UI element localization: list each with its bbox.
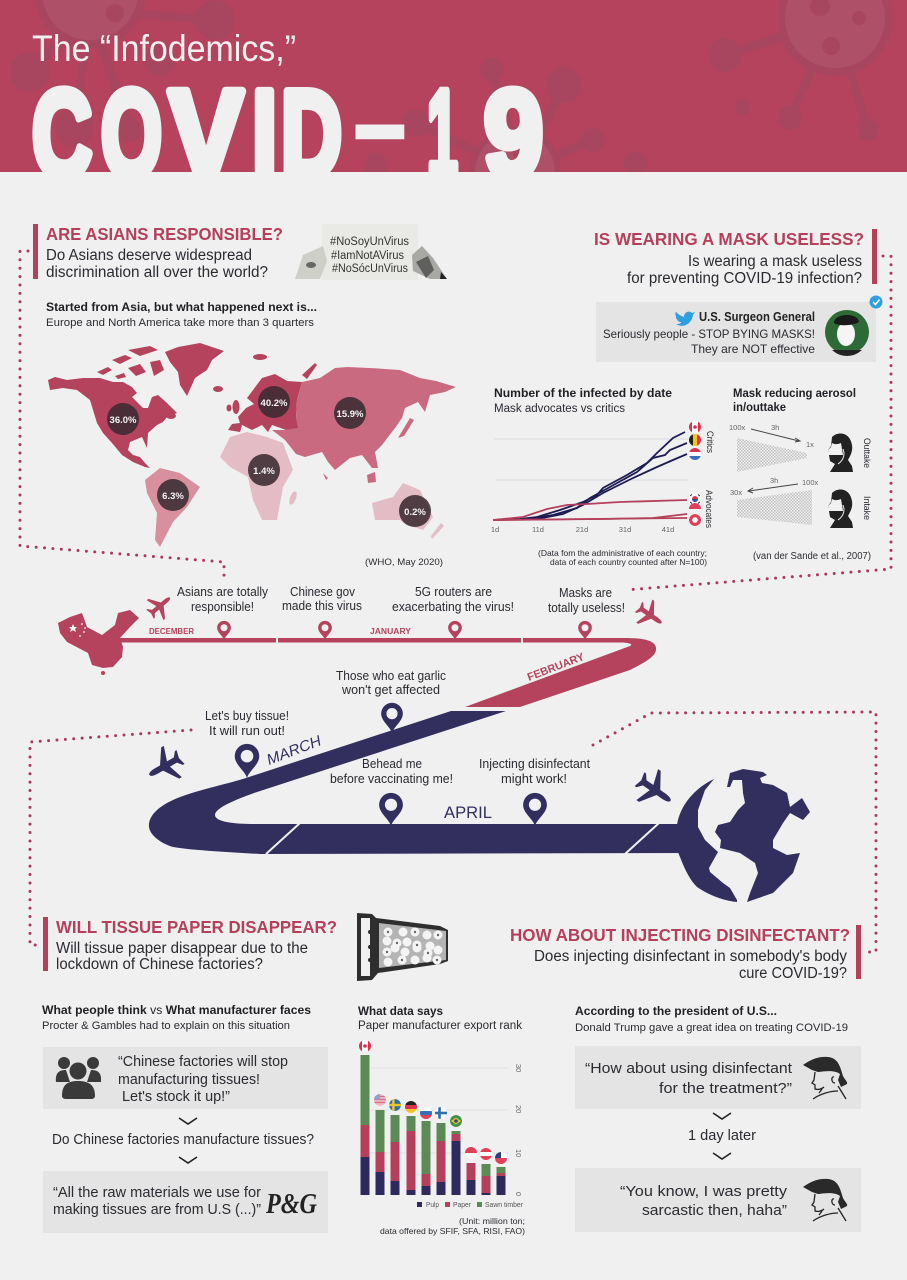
question: cure COVID-19? bbox=[739, 965, 847, 982]
mask aerosol heading: in/outtake bbox=[733, 400, 786, 414]
icons: planes bbox=[140, 588, 681, 816]
heading: IS WEARING A MASK USELESS? bbox=[594, 229, 864, 249]
question bbox=[56, 940, 308, 973]
group labels: Critics bbox=[705, 431, 715, 453]
section bar bbox=[33, 224, 38, 279]
diagram: intake: 3h bbox=[770, 476, 778, 485]
axis labels: 21d bbox=[576, 525, 588, 534]
axis labels: 10 bbox=[514, 1149, 523, 1157]
critic lines bbox=[493, 432, 687, 520]
quote box: second statement: “You know, I was pretty bbox=[620, 1183, 788, 1200]
question: discrimination all over the world? bbox=[46, 264, 268, 281]
map pins navy bbox=[235, 703, 547, 826]
icon: people bbox=[56, 1057, 101, 1099]
rumor labels: Injecting disinfectant bbox=[479, 757, 591, 771]
title: COVID-19: 9 bbox=[484, 66, 543, 204]
question bbox=[46, 247, 268, 281]
chart note: data of each country counted after N=100) bbox=[550, 557, 707, 567]
question line: Do Chinese factories manufacture tissues? bbox=[52, 1132, 314, 1148]
axis labels: 41d bbox=[662, 525, 674, 534]
question: lockdown of Chinese factories? bbox=[56, 956, 263, 973]
subheading: According to the president of U.S... bbox=[575, 1004, 777, 1018]
axis labels: 31d bbox=[619, 525, 631, 534]
rumor labels bbox=[177, 585, 625, 786]
tweet text: They are NOT effective bbox=[691, 342, 815, 356]
icon: Trump portrait bbox=[803, 1179, 847, 1221]
heading: ARE ASIANS RESPONSIBLE? bbox=[46, 224, 283, 244]
hashtag sign: #IamNotAVirus bbox=[331, 250, 404, 262]
chart heading: What data says bbox=[358, 1004, 443, 1018]
icon: twitter bird bbox=[675, 312, 695, 326]
subtext: Procter & Gambles had to explain on this situation bbox=[42, 1020, 290, 1032]
background virus shapes bbox=[10, 0, 893, 172]
world map bbox=[48, 343, 456, 547]
rumor labels: made this virus bbox=[282, 599, 362, 613]
title: COVID-19: - bbox=[348, 53, 412, 191]
title line: The “Infodemics,” bbox=[32, 28, 296, 69]
icon: surgeon avatar bbox=[825, 310, 869, 356]
value labels: 0.2% bbox=[404, 507, 426, 518]
rumor labels: responsible! bbox=[191, 600, 254, 614]
source: (WHO, May 2020) bbox=[365, 557, 443, 568]
Asia bbox=[272, 367, 456, 483]
source: (van der Sande et al., 2007) bbox=[753, 551, 871, 562]
rumor labels: Masks are bbox=[559, 586, 612, 600]
diagram: intake bbox=[730, 476, 872, 528]
quote box: first statement: for the treatment?” bbox=[659, 1080, 792, 1097]
axis labels bbox=[491, 525, 674, 534]
arrow chevron bbox=[713, 1153, 731, 1159]
section bar bbox=[872, 229, 877, 284]
quote box: P&G bbox=[43, 1171, 328, 1233]
group labels bbox=[704, 431, 715, 528]
quote box: people: Let's stock it up!” bbox=[122, 1089, 230, 1105]
axis labels: 20 bbox=[514, 1105, 523, 1113]
chart subheading: Paper manufacturer export rank bbox=[358, 1020, 522, 1032]
hashtag sign: #NoSoyUnVirus bbox=[330, 236, 409, 248]
subheading: What people think vs What manufacturer faces bbox=[42, 1003, 311, 1017]
sawn timber segments bbox=[360, 1055, 506, 1176]
quote box: first statement bbox=[575, 1046, 861, 1109]
Australia bbox=[372, 483, 444, 539]
value labels: 6.3% bbox=[162, 491, 184, 502]
icon: masked head bbox=[828, 489, 853, 528]
legend: Paper bbox=[453, 1200, 471, 1209]
subtext: Donald Trump gave a great idea on treating COVID-19 bbox=[575, 1022, 848, 1034]
title: COVID-19: D bbox=[281, 66, 342, 204]
value labels: 15.9% bbox=[337, 409, 364, 420]
diagram: outtake: Outtake bbox=[862, 438, 872, 468]
rumor labels: totally useless! bbox=[548, 601, 625, 615]
icon: China map bbox=[58, 610, 139, 675]
month label: April: APRIL bbox=[444, 803, 492, 822]
question: Will tissue paper disappear due to the bbox=[56, 940, 308, 957]
chart heading: Number of the infected by date bbox=[494, 386, 672, 400]
logo: P&G: P&G bbox=[265, 1188, 317, 1220]
value labels: 36.0% bbox=[110, 415, 137, 426]
tweet text: Seriously people - STOP BYING MASKS! bbox=[603, 327, 815, 341]
tweet card bbox=[596, 296, 882, 362]
icon: verified check bbox=[870, 296, 882, 308]
hashtag sign bbox=[295, 224, 447, 280]
rumor labels: It will run out! bbox=[209, 724, 285, 738]
question: for preventing COVID-19 infection? bbox=[627, 270, 862, 287]
quote box: people bbox=[43, 1047, 328, 1109]
quote box: second statement bbox=[575, 1168, 861, 1232]
icon: masked head bbox=[828, 433, 853, 472]
pulp segments bbox=[360, 1141, 506, 1195]
value labels bbox=[110, 398, 426, 518]
quote box: second statement: sarcastic then, haha” bbox=[642, 1202, 787, 1219]
question bbox=[627, 253, 862, 287]
title: COVID-19: I bbox=[252, 66, 277, 204]
chart subheading: Mask advocates vs critics bbox=[494, 403, 625, 415]
value labels: 1.4% bbox=[253, 466, 275, 477]
quote box: P&G: “All the raw materials we use for bbox=[53, 1185, 261, 1201]
stacked bar chart bbox=[359, 1040, 523, 1209]
rumor labels: 5G routers are bbox=[415, 585, 492, 599]
question: Is wearing a mask useless bbox=[688, 253, 862, 270]
quote box: first statement: “How about using disinfectant bbox=[585, 1060, 793, 1077]
axis labels bbox=[514, 1064, 523, 1196]
dotted connector: right bottom bbox=[593, 712, 876, 952]
section bar bbox=[856, 925, 861, 979]
dotted connector: left top bbox=[20, 251, 224, 582]
panel: are Asians responsible bbox=[33, 224, 456, 568]
diagram: intake: Intake bbox=[862, 496, 872, 520]
diagram: outtake: 100x bbox=[729, 423, 746, 432]
value labels: 40.2% bbox=[261, 398, 288, 409]
panel: injecting disinfectant bbox=[510, 925, 861, 1232]
value bubbles bbox=[107, 386, 431, 527]
panel: is wearing a mask useless bbox=[491, 229, 882, 567]
road separators bbox=[266, 636, 659, 854]
time label: 1 day later bbox=[688, 1128, 756, 1144]
subheading: Started from Asia, but what happened next is... bbox=[46, 300, 317, 314]
tweet text: U.S. Surgeon General bbox=[699, 310, 815, 324]
arrow chevron bbox=[713, 1113, 731, 1119]
icon: Trump portrait bbox=[803, 1057, 847, 1099]
tweet text bbox=[603, 310, 815, 356]
legend: Pulp bbox=[426, 1200, 439, 1209]
chart note: (Unit: million ton; bbox=[459, 1216, 525, 1226]
South America bbox=[145, 468, 200, 547]
chart note: (Data fom the administrative of each country; bbox=[538, 548, 707, 558]
rumor labels: Behead me bbox=[362, 757, 422, 771]
section bar bbox=[43, 917, 48, 971]
chart note bbox=[380, 1216, 525, 1236]
month labels: DECEMBER bbox=[149, 627, 194, 636]
diagram: outtake: 3h bbox=[771, 423, 779, 432]
dotted connector: left bottom bbox=[30, 730, 191, 945]
dotted connector: right top bbox=[625, 256, 891, 590]
header banner bbox=[0, 0, 907, 172]
rumor labels: might work! bbox=[501, 772, 567, 786]
diagram: outtake: 1x bbox=[806, 440, 814, 449]
heading: WILL TISSUE PAPER DISAPPEAR? bbox=[56, 917, 337, 937]
chart note bbox=[538, 548, 707, 567]
line chart: infected by date bbox=[491, 421, 715, 534]
axis labels: 11d bbox=[532, 525, 544, 534]
rumor labels: Chinese gov bbox=[290, 585, 356, 599]
arrow chevron bbox=[179, 1118, 197, 1124]
icon: globe bbox=[676, 769, 810, 902]
axis labels: 0 bbox=[514, 1192, 523, 1196]
icon: shopping cart with rolls bbox=[357, 913, 448, 981]
bar flags bbox=[359, 1040, 507, 1164]
arrow chevron bbox=[179, 1157, 197, 1163]
rumor labels: Asians are totally bbox=[177, 585, 269, 599]
panel: will tissue paper disappear bbox=[42, 913, 448, 1233]
month labels bbox=[149, 627, 587, 769]
group labels: Advocates bbox=[704, 490, 714, 528]
country flags bbox=[689, 421, 701, 526]
paper segments bbox=[360, 1125, 506, 1193]
legend: Sawn timber bbox=[485, 1200, 523, 1209]
map pins bbox=[217, 621, 592, 640]
month labels: JANUARY bbox=[370, 627, 412, 636]
rumor labels: won't get affected bbox=[341, 683, 440, 697]
month labels: FEBRUARY bbox=[526, 651, 587, 684]
chart note: data offered by SFIF, SFA, RISI, FAO) bbox=[380, 1226, 525, 1236]
month labels: MARCH bbox=[264, 732, 324, 769]
rumor labels: exacerbating the virus! bbox=[392, 600, 514, 614]
hashtag sign: #NoSócUnVirus bbox=[332, 263, 408, 275]
Africa bbox=[220, 432, 298, 520]
quote box: people: manufacturing tissues! bbox=[118, 1072, 260, 1088]
title: COVID-19: 1 bbox=[427, 66, 458, 204]
axis labels: 1d bbox=[491, 525, 499, 534]
title: COVID-19: C bbox=[32, 66, 92, 204]
title: COVID-19: O bbox=[101, 66, 162, 204]
diagram: outtake bbox=[729, 423, 872, 472]
axis labels: 30 bbox=[514, 1064, 523, 1072]
question: Do Asians deserve widespread bbox=[46, 247, 252, 264]
mask aerosol heading: Mask reducing aerosol bbox=[733, 386, 856, 400]
panel: what data says bbox=[358, 1004, 525, 1236]
quote box: people: “Chinese factories will stop bbox=[118, 1054, 288, 1070]
rumor labels: Let's buy tissue! bbox=[205, 709, 289, 723]
timeline bbox=[58, 585, 810, 902]
road: navy section bbox=[149, 711, 690, 854]
diagram: intake: 100x bbox=[802, 478, 819, 487]
diagram: intake: 30x bbox=[730, 488, 742, 497]
title: COVID-19: V bbox=[169, 66, 243, 204]
Europe bbox=[226, 363, 317, 432]
subtext: Europe and North America take more than 3 quarters bbox=[46, 317, 315, 329]
heading: HOW ABOUT INJECTING DISINFECTANT? bbox=[510, 925, 850, 945]
North America and Greenland bbox=[48, 343, 267, 468]
question: Does injecting disinfectant in somebody's body bbox=[534, 948, 847, 965]
mask aerosol heading bbox=[733, 386, 856, 414]
rumor labels: before vaccinating me! bbox=[330, 772, 453, 786]
rumor labels: Those who eat garlic bbox=[336, 669, 446, 683]
quote box: P&G: making tissues are from U.S (...)” bbox=[53, 1202, 261, 1218]
question bbox=[534, 948, 847, 982]
advocate lines bbox=[493, 500, 687, 520]
road: red section bbox=[118, 638, 656, 707]
legend bbox=[417, 1200, 523, 1209]
